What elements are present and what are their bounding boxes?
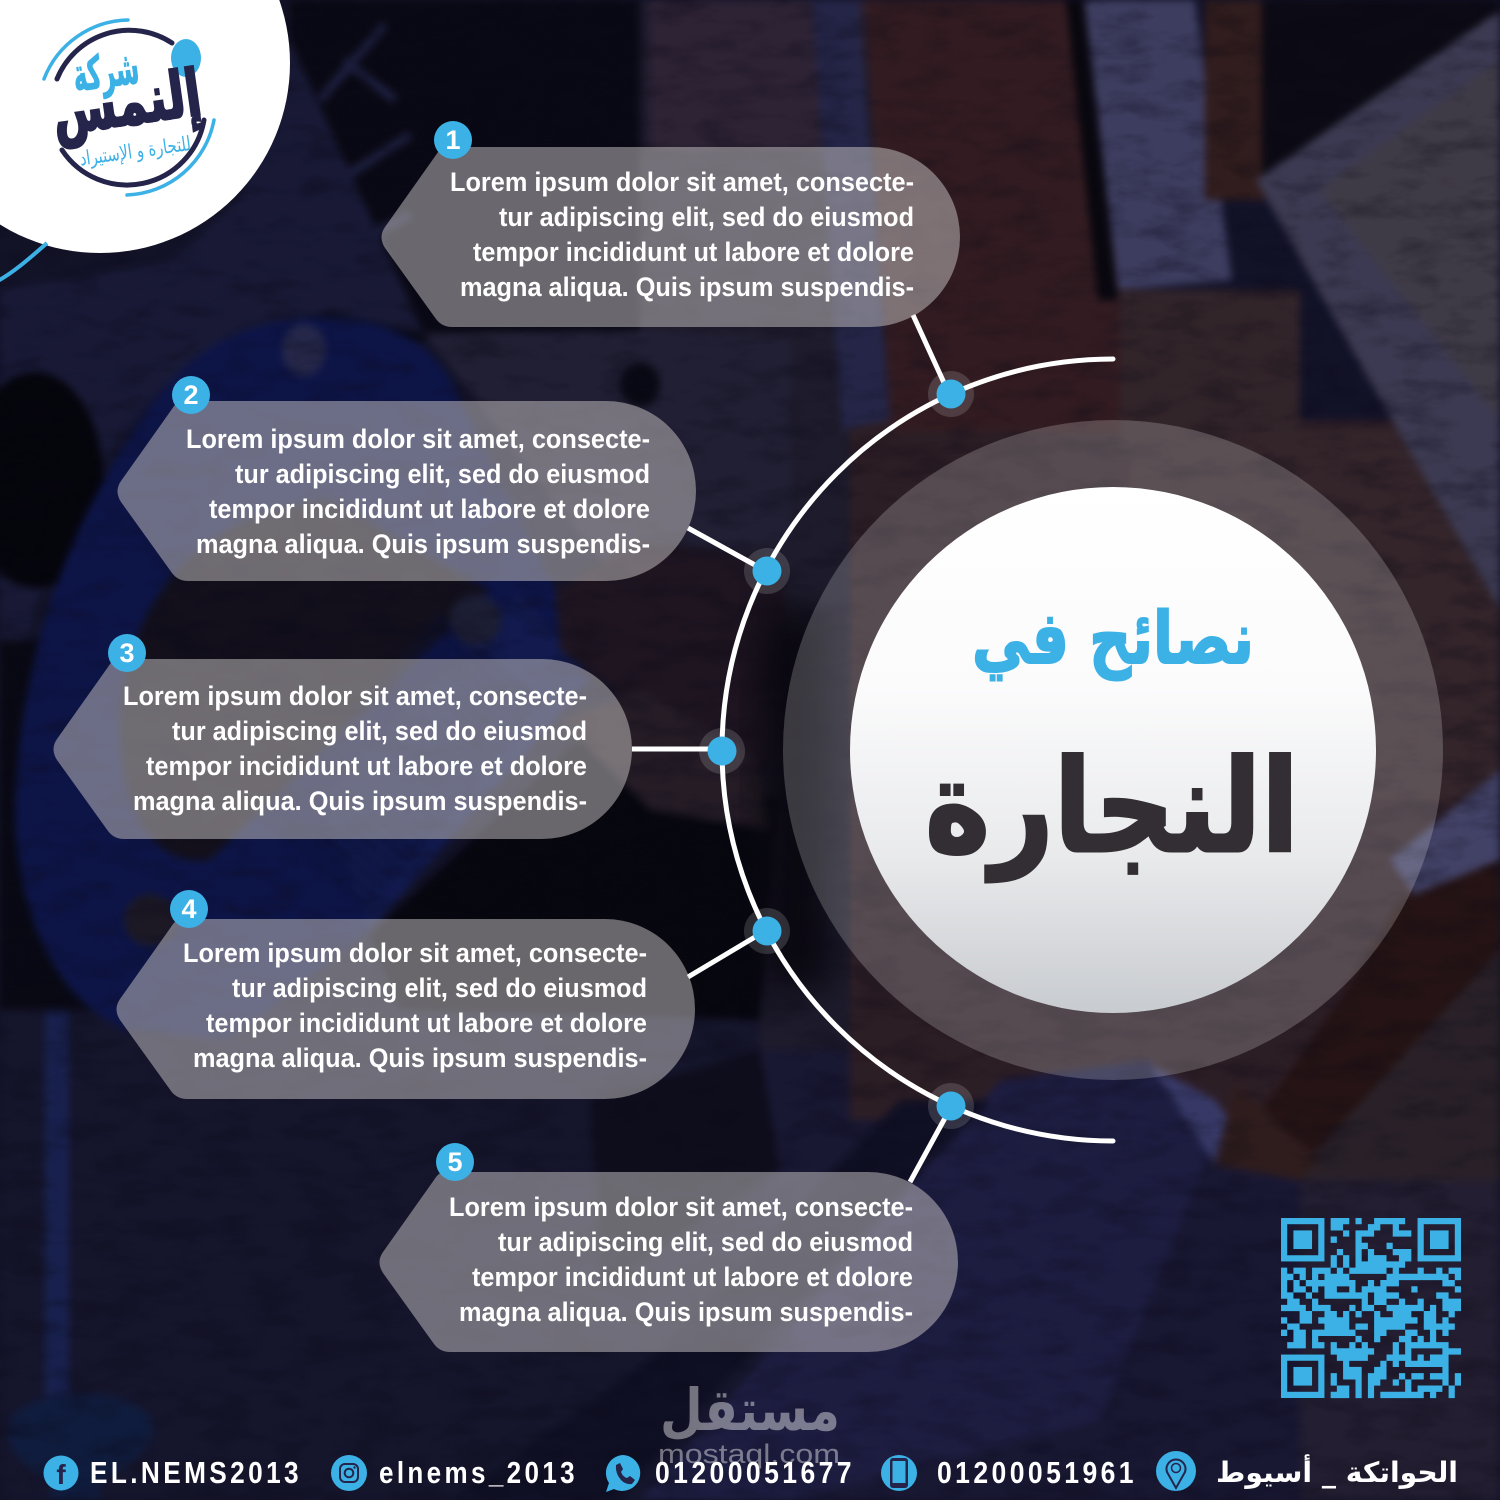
panel: tip 4 [116,890,695,1099]
panel: tip 5: magna aliqua. Quis ipsum suspendis- [459,1297,913,1327]
panel: tip 4: magna aliqua. Quis ipsum suspendis- [193,1043,647,1073]
footer: whatsapp [606,1455,855,1492]
logo badge [0,0,290,283]
footer: location: الحواتكة _ أسيوط [1216,1454,1458,1489]
panel: tip 4: tempor incididunt ut labore et dolore [206,1008,647,1038]
panel: tip 5 [380,1143,958,1352]
central discs [783,420,1443,1080]
panel: tip 1: tempor incididunt ut labore et dolore [473,237,914,267]
panel: tip 2: 2 [183,380,199,410]
watermark: mostaql [658,1376,840,1469]
title: tips in: نصائح في [972,596,1254,681]
footer: whatsapp: 01200051677 [655,1455,855,1490]
panel: tip 5: tempor incididunt ut labore et dolore [472,1262,913,1292]
panel: tip 2: Lorem ipsum dolor sit amet, consecte- [186,424,650,454]
vertical rod [45,1010,69,1410]
hammer wood [555,540,800,790]
blue clamp [15,318,590,1040]
logo wordmark: إلنمس [47,56,206,151]
panel: tip 2: tempor incididunt ut labore et dolore [209,494,650,524]
footer: instagram [331,1455,578,1491]
panel: tip 2: tur adipiscing elit, sed do eiusmod [235,459,650,489]
footer: location [1156,1451,1458,1491]
panel: tip 1 [382,121,960,327]
panel: tip 5: Lorem ipsum dolor sit amet, consecte- [449,1192,913,1222]
dark behind handle [370,730,780,1020]
panel: tip 3: tempor incididunt ut labore et dolore [146,751,587,781]
panel: tip 3: magna aliqua. Quis ipsum suspendis- [133,786,587,816]
watermark: mostaql: مستقل [660,1376,840,1444]
panel: tip 3: 3 [119,638,135,668]
timeline arc and connectors [632,315,1113,1182]
chisel [1390,770,1500,915]
bolts on clamp [124,324,660,946]
dark gap behind the left of the discs [760,610,830,990]
footer: phone: 01200051961 [937,1455,1137,1490]
footer: instagram: elnems_2013 [379,1455,578,1490]
footer: phone [881,1455,1137,1491]
panel: tip 1: 1 [445,125,461,155]
top centre dark [290,0,640,340]
logo wordmark [44,32,209,173]
panel: tip 1: tur adipiscing elit, sed do eiusmod [499,202,914,232]
panel: tip 2 [118,376,696,581]
panel: tip 3: tur adipiscing elit, sed do eiusmod [172,716,587,746]
logo wordmark: للتجارة و الإستيراد [78,131,192,170]
wood block top [865,0,1150,430]
panel: tip 1: magna aliqua. Quis ipsum suspendis- [460,272,914,302]
tube bottom [640,1060,1210,1500]
logo rings [44,20,214,195]
sandpaper block [1256,10,1500,610]
saw handle [0,33,424,720]
footer: facebook: f [56,1459,66,1490]
panel: tip 5: tur adipiscing elit, sed do eiusmod [498,1227,913,1257]
panel: tip 4: 4 [181,894,197,924]
light handle [1084,0,1232,290]
far background planks [620,0,880,1150]
panel: tip 5: 5 [447,1147,463,1177]
panel: tip 3: Lorem ipsum dolor sit amet, consecte- [123,681,587,711]
title: carpentry: النجارة [925,733,1299,882]
logo wordmark: شركة [69,40,142,102]
timeline nodes [699,371,974,1129]
QR code [1281,1221,1461,1395]
panel: tip 4: tur adipiscing elit, sed do eiusmod [232,973,647,1003]
knob [8,1394,153,1500]
panel: tip 2: magna aliqua. Quis ipsum suspendis- [196,529,650,559]
panel: tip 3 [54,634,632,839]
panel: tip 1: Lorem ipsum dolor sit amet, consecte- [450,167,914,197]
watermark: mostaql: mostaql.com [658,1439,840,1469]
footer: facebook: EL.NEMS2013 [90,1455,302,1490]
panel: tip 4: Lorem ipsum dolor sit amet, consecte- [183,938,647,968]
